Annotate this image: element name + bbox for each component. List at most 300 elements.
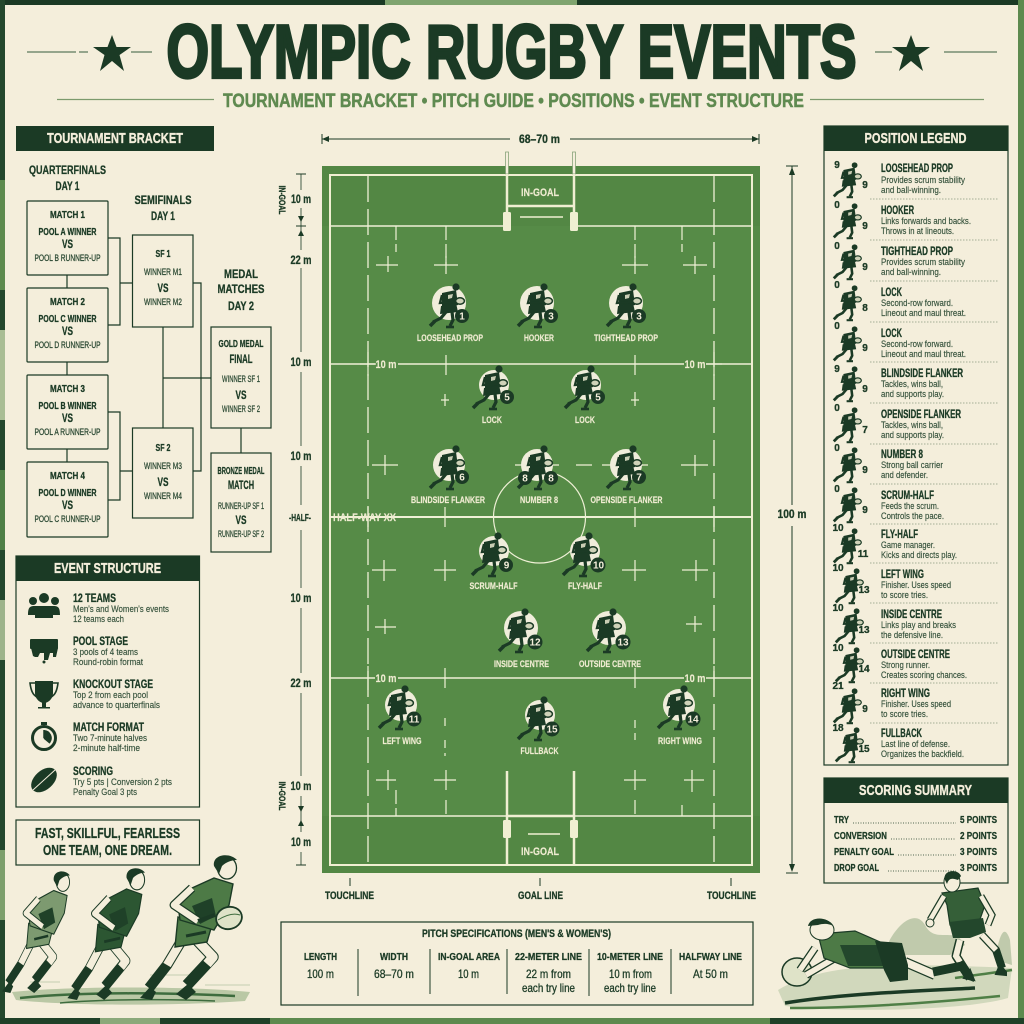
subtitle: TOURNAMENT BRACKET • PITCH GUIDE • POSITIONS • EVENT STRUCTURE — [223, 91, 804, 112]
panel: position legend — [824, 126, 1008, 765]
legend: tighthead prop: TIGHTHEAD PROP — [881, 246, 953, 258]
legend: loosehead prop: 9 — [834, 160, 840, 171]
line labels: 10 m — [376, 359, 397, 371]
legend: inside centre: Links play and breaks — [881, 620, 956, 631]
semifinals heading: DAY 1 — [151, 209, 175, 223]
legend: fly-half: 10 — [832, 523, 844, 534]
bracket heading: TOURNAMENT BRACKET — [47, 130, 183, 147]
player: fly-half: 10 — [593, 560, 604, 572]
player: lock right: 5 — [595, 392, 601, 404]
standing player — [926, 871, 1006, 980]
legend: openside flanker: OPENSIDE FLANKER — [881, 409, 961, 421]
spec: 10-meter line: 10 m from — [609, 967, 652, 981]
legend: number 8: 9 — [862, 465, 868, 476]
match 1: MATCH 1 — [50, 209, 85, 221]
semifinal 1: VS — [158, 281, 168, 295]
item: 12 teams: 12 teams each — [73, 614, 124, 625]
left distance markers: 22 m — [290, 255, 312, 267]
score row: try: 5 POINTS — [960, 814, 997, 826]
player: outside centre — [579, 608, 641, 670]
gold medal final: WINNER SF 1 — [222, 374, 260, 385]
player: fly-half — [563, 532, 606, 592]
legend: fly-half: Game manager. — [881, 540, 935, 551]
player: loosehead prop: 1 — [459, 312, 465, 322]
player: blindside flanker — [411, 445, 485, 506]
player: lock left: 5 — [504, 392, 510, 404]
legend: lock: 9 — [862, 343, 868, 354]
score row: penalty goal — [834, 846, 997, 858]
spec: in-goal area — [438, 951, 500, 981]
bronze medal match: BRONZE MEDAL — [218, 465, 265, 477]
legend: scrum-half: Controls the pace. — [881, 511, 944, 522]
match 3: MATCH 3 — [50, 383, 85, 395]
medal matches heading: DAY 2 — [228, 299, 254, 313]
item: match format: MATCH FORMAT — [73, 722, 144, 734]
quarterfinals heading: DAY 1 — [56, 179, 80, 193]
player: scrum-half: SCRUM-HALF — [470, 581, 518, 592]
legend: lock: Lineout and maul threat. — [881, 349, 966, 360]
legend: fullback: 15 — [858, 744, 870, 755]
player: number 8: 8 — [522, 474, 528, 484]
legend: scrum-half: SCRUM-HALF — [881, 490, 934, 502]
item: pool stage: Round-robin format — [73, 657, 143, 668]
score row: penalty goal: PENALTY GOAL — [834, 846, 894, 858]
spec: in-goal area: 10 m — [458, 967, 479, 981]
spec: 22-meter line — [515, 951, 582, 995]
player: left wing — [379, 685, 422, 747]
player: inside centre — [494, 608, 549, 670]
legend: outside centre: 10 — [832, 643, 844, 654]
illustration: three running players — [2, 855, 250, 1005]
player: loosehead prop — [417, 283, 483, 344]
legend: tighthead prop: Provides scrum stability — [881, 257, 965, 268]
item: knockout stage: KNOCKOUT STAGE — [73, 679, 153, 691]
spec: halfway line: At 50 m — [693, 967, 728, 981]
semifinal 1: SF 1 — [156, 248, 171, 260]
legend: scrum-half: Feeds the scrum. — [881, 501, 939, 512]
legend: lock: Second-row forward. — [881, 339, 953, 350]
player: right wing: RIGHT WING — [658, 736, 702, 747]
player: tighthead prop: TIGHTHEAD PROP — [594, 333, 658, 344]
player: left wing: 11 — [409, 714, 420, 726]
player: inside centre: 12 — [529, 638, 541, 648]
legend: outside centre — [832, 643, 967, 682]
legend: scrum-half: 9 — [862, 505, 868, 516]
spec: 10-meter line: 10-METER LINE — [597, 951, 663, 963]
match 2: POOL C WINNER — [38, 313, 97, 325]
quarterfinals heading — [29, 163, 106, 193]
legend: number 8: 0 — [834, 443, 840, 454]
quarterfinals heading: QUARTERFINALS — [29, 163, 106, 177]
item: match format: Two 7-minute halves — [73, 733, 147, 744]
label: top in-goal: IN-GOAL — [521, 187, 559, 199]
player: outside centre: OUTSIDE CENTRE — [579, 659, 641, 670]
player: hooker: HOOKER — [524, 333, 554, 344]
score row: conversion: CONVERSION — [834, 830, 887, 842]
player: scrum-half — [470, 532, 518, 592]
score row: try — [834, 814, 997, 826]
connectors — [67, 238, 241, 500]
pitch edge labels: TOUCHLINE — [325, 890, 374, 902]
legend heading: POSITION LEGEND — [864, 130, 967, 147]
legend: outside centre: 14 — [858, 664, 870, 675]
left distance markers: 22 m — [290, 678, 312, 690]
legend: inside centre — [832, 603, 956, 643]
event structure heading: EVENT STRUCTURE — [54, 560, 161, 577]
left distance markers: 10 m — [290, 593, 312, 605]
bronze medal match — [211, 453, 271, 552]
left distance markers: 10 m — [290, 357, 312, 369]
panel: pitch specifications — [281, 922, 753, 1005]
legend: loosehead prop — [834, 160, 965, 197]
legend: inside centre: INSIDE CENTRE — [881, 609, 942, 621]
score row: conversion: 2 POINTS — [960, 830, 997, 842]
line labels: 10 m — [684, 359, 706, 371]
legend: left wing: 13 — [858, 585, 870, 596]
legend: hooker: 9 — [862, 221, 868, 232]
item: knockout stage — [73, 679, 160, 711]
legend: lock: 8 — [862, 303, 868, 314]
match 4: VS — [62, 498, 73, 512]
legend: openside flanker: 0 — [834, 403, 840, 414]
spec: length: 100 m — [307, 967, 334, 981]
legend: loosehead prop: LOOSEHEAD PROP — [881, 163, 953, 175]
line labels: 10 m — [684, 673, 706, 685]
bottom goal posts — [503, 771, 578, 865]
match 3: POOL B WINNER — [38, 400, 97, 412]
score row: drop goal — [834, 862, 997, 874]
item: pool stage — [73, 636, 143, 668]
gold medal final: VS — [236, 388, 246, 402]
legend heading — [824, 126, 1008, 151]
semifinal 2: WINNER M4 — [144, 491, 182, 502]
spec: width: WIDTH — [380, 951, 408, 963]
player: hooker: 3 — [548, 312, 554, 322]
left distance markers: 10 m — [291, 194, 311, 206]
legend: tighthead prop: 0 — [834, 241, 840, 252]
pitch markings — [330, 175, 752, 865]
legend: openside flanker: 7 — [862, 425, 868, 436]
legend: right wing: 9 — [862, 704, 868, 715]
legend: blindside flanker: and supports play. — [881, 389, 944, 400]
legend: tighthead prop — [834, 241, 965, 279]
score row: drop goal: DROP GOAL — [834, 862, 879, 874]
player: lock left: LOCK — [482, 415, 502, 426]
match 2 — [27, 288, 108, 362]
legend: blindside flanker: 9 — [834, 364, 840, 375]
semifinal 2: VS — [158, 475, 168, 489]
match 3: POOL A RUNNER-UP — [34, 427, 100, 438]
icon: teams — [28, 593, 60, 618]
panel: pitch specifications: PITCH SPECIFICATIONS (MEN'S & WOMEN'S) — [422, 928, 611, 940]
match 1: VS — [62, 237, 73, 251]
player: blindside flanker: BLINDSIDE FLANKER — [411, 495, 485, 506]
spec: 10-meter line: each try line — [604, 981, 656, 995]
legend: left wing: 10 — [832, 563, 844, 574]
player: number 8 — [518, 445, 558, 506]
item: match format: 2-minute half-time — [73, 743, 140, 754]
panel: scoring summary — [824, 778, 1008, 883]
player: right wing: 14 — [687, 714, 699, 726]
player: lock left — [473, 365, 514, 426]
icon: pool stage — [30, 639, 58, 664]
semifinal 1: WINNER M2 — [144, 297, 182, 308]
gold medal final — [211, 327, 271, 428]
spec: length — [304, 951, 337, 981]
legend: right wing: 21 — [832, 681, 844, 692]
legend: lock: 0 — [834, 321, 840, 332]
match 3 — [27, 375, 108, 449]
match 1: POOL B RUNNER-UP — [34, 253, 100, 264]
semifinals heading: SEMIFINALS — [134, 193, 192, 207]
medal matches heading — [218, 267, 264, 313]
width dimension — [322, 134, 759, 146]
semifinal 1 — [132, 235, 193, 327]
score row: conversion — [834, 830, 997, 842]
item: 12 teams: Men's and Women's events — [73, 604, 169, 615]
semifinal 1: WINNER M1 — [144, 267, 182, 278]
slogan — [16, 820, 200, 865]
legend: right wing — [832, 681, 951, 723]
left distance markers: 10 m — [291, 837, 311, 849]
legend: outside centre: Strong runner. — [881, 660, 930, 671]
legend: fullback: 18 — [832, 723, 844, 734]
legend: lock: LOCK — [881, 287, 902, 299]
label: bottom in-goal: IN-GOAL — [521, 846, 559, 858]
legend: tighthead prop: and ball-winning. — [881, 267, 941, 278]
legend: left wing — [832, 563, 951, 603]
legend: scrum-half: 0 — [834, 484, 840, 495]
legend: lock: 0 — [834, 280, 840, 291]
spec: halfway line — [679, 951, 742, 981]
spec: width: 68–70 m — [374, 967, 414, 981]
match 2: VS — [62, 324, 73, 338]
width dimension: 68–70 m — [519, 134, 560, 146]
player: right wing — [658, 685, 702, 747]
legend: number 8 — [834, 443, 943, 482]
score row: drop goal: 3 POINTS — [960, 862, 997, 874]
match 3: VS — [62, 411, 73, 425]
panel: tournament bracket — [16, 126, 271, 552]
legend: loosehead prop: 9 — [862, 180, 868, 191]
legend: number 8: and defender. — [881, 470, 928, 481]
match 4 — [27, 462, 108, 537]
semifinals heading — [134, 193, 192, 223]
legend: fullback: Organizes the backfield. — [881, 749, 964, 760]
legend: number 8: Strong ball carrier — [881, 460, 943, 471]
item: knockout stage: advance to quarterfinals — [73, 700, 160, 711]
player: inside centre: INSIDE CENTRE — [494, 659, 549, 670]
legend: scrum-half — [834, 484, 944, 522]
diving player — [782, 918, 974, 986]
legend: fullback: Last line of defense. — [881, 739, 950, 750]
legend: inside centre: the defensive line. — [881, 630, 943, 641]
match 4: MATCH 4 — [50, 470, 85, 482]
illustration: player scoring a try — [778, 871, 1012, 1010]
icon: trophy — [30, 681, 58, 708]
legend: right wing: RIGHT WING — [881, 688, 930, 700]
left distance markers: 10 m — [290, 451, 312, 463]
spec: 22-meter line: 22 m from — [526, 967, 571, 981]
semifinal 2 — [132, 428, 193, 518]
legend: lock: Lineout and maul threat. — [881, 308, 966, 319]
player: lock right — [565, 365, 605, 426]
scoring heading — [824, 778, 1008, 803]
legend: right wing: Finisher. Uses speed — [881, 699, 951, 710]
legend: fullback — [832, 723, 964, 762]
legend: left wing: to score tries. — [881, 590, 928, 601]
top goal posts — [503, 152, 578, 231]
icon: rugby ball — [26, 763, 62, 797]
legend: loosehead prop: Provides scrum stability — [881, 175, 965, 186]
item: 12 teams: 12 TEAMS — [73, 593, 116, 605]
item: knockout stage: Top 2 from each pool — [73, 690, 148, 701]
legend: blindside flanker: 9 — [862, 384, 868, 395]
line labels — [333, 359, 706, 685]
match 2: POOL D RUNNER-UP — [34, 340, 100, 351]
medal matches heading: MEDAL — [224, 267, 258, 281]
legend: fly-half: Kicks and directs play. — [881, 550, 957, 561]
score row: penalty goal: 3 POINTS — [960, 846, 997, 858]
player: tighthead prop — [594, 283, 658, 344]
medal matches heading: MATCHES — [218, 282, 264, 296]
bronze medal match: VS — [236, 513, 246, 527]
player: openside flanker: 7 — [636, 472, 642, 484]
legend: fly-half: FLY-HALF — [881, 529, 918, 541]
spec: width — [374, 951, 414, 981]
bronze medal match: RUNNER-UP SF 1 — [218, 501, 264, 512]
legend: openside flanker: and supports play. — [881, 430, 944, 441]
item: match format — [73, 722, 147, 754]
match 2: MATCH 2 — [50, 296, 85, 308]
player: fullback — [518, 696, 560, 757]
item: pool stage: 3 pools of 4 teams — [73, 647, 138, 658]
spec: halfway line: HALFWAY LINE — [679, 951, 742, 963]
left distance markers: IN-GOAL — [277, 186, 287, 215]
gold medal final: WINNER SF 2 — [222, 404, 260, 415]
player: fly-half: FLY-HALF — [568, 581, 602, 592]
player: outside centre: 13 — [617, 638, 629, 648]
legend: blindside flanker: Tackles, wins ball, — [881, 379, 943, 390]
left distance markers: IN-GOAL — [277, 782, 287, 811]
player: openside flanker: OPENSIDE FLANKER — [590, 495, 663, 506]
item: scoring — [73, 766, 172, 798]
spec: in-goal area: IN-GOAL AREA — [438, 951, 500, 963]
legend: hooker: 0 — [834, 200, 840, 211]
legend: inside centre: 13 — [858, 625, 870, 636]
spec: 10-meter line — [597, 951, 663, 995]
legend: lock — [834, 280, 966, 320]
panel: event structure — [16, 556, 200, 807]
legend: left wing: Finisher. Uses speed — [881, 580, 951, 591]
spec: 22-meter line: each try line — [522, 981, 575, 995]
left distance markers: -HALF- — [289, 513, 311, 524]
player: left wing: LEFT WING — [382, 736, 422, 747]
legend: lock: LOCK — [881, 328, 902, 340]
gold medal final: GOLD MEDAL — [218, 338, 264, 350]
icon: right star — [892, 35, 930, 71]
legend: fly-half: 11 — [858, 549, 869, 560]
length dimension — [778, 166, 806, 873]
player: number 8: 8 — [548, 474, 554, 484]
semifinal 2: SF 2 — [156, 442, 171, 454]
pitch edge labels: GOAL LINE — [518, 890, 563, 902]
bronze medal match: MATCH — [228, 478, 254, 492]
legend: hooker: Links forwards and backs. — [881, 216, 971, 227]
item: pool stage: POOL STAGE — [73, 636, 128, 648]
legend: number 8: NUMBER 8 — [881, 449, 923, 461]
icon: stopwatch — [32, 722, 56, 750]
line labels: HALF-WAY XX — [333, 512, 397, 524]
legend: hooker: Throws in at lineouts. — [881, 226, 954, 237]
legend: hooker: HOOKER — [881, 205, 914, 217]
legend: lock — [834, 321, 966, 361]
legend: lock: Second-row forward. — [881, 298, 953, 309]
item: scoring: SCORING — [73, 766, 113, 778]
legend: hooker — [834, 200, 971, 238]
player: fullback: 15 — [546, 724, 558, 736]
item: scoring: Penalty Goal 3 pts — [73, 787, 137, 798]
slogan: ONE TEAM, ONE DREAM. — [43, 843, 172, 859]
legend: blindside flanker: BLINDSIDE FLANKER — [881, 368, 963, 380]
player: blindside flanker: 6 — [459, 472, 465, 484]
item: 12 teams — [73, 593, 169, 625]
spec: 22-meter line: 22-METER LINE — [515, 951, 582, 963]
scoring heading: SCORING SUMMARY — [859, 782, 972, 799]
legend: openside flanker: Tackles, wins ball, — [881, 420, 943, 431]
legend: outside centre: Creates scoring chances. — [881, 670, 967, 681]
player: lock right: LOCK — [575, 415, 595, 426]
pitch edge labels: TOUCHLINE — [707, 890, 756, 902]
pitch — [322, 152, 760, 873]
legend: blindside flanker — [834, 364, 963, 401]
item: scoring: Try 5 pts | Conversion 2 pts — [73, 777, 172, 788]
match 4: POOL C RUNNER-UP — [34, 514, 100, 525]
legend: tighthead prop: 9 — [862, 262, 868, 273]
player: number 8: NUMBER 8 — [520, 495, 558, 506]
slogan: FAST, SKILLFUL, FEARLESS — [35, 826, 180, 842]
left distance markers — [277, 174, 312, 865]
legend: left wing: LEFT WING — [881, 569, 924, 581]
semifinal 2: WINNER M3 — [144, 461, 182, 472]
left distance markers: 10 m — [290, 781, 312, 793]
legend: loosehead prop: and ball-winning. — [881, 185, 941, 196]
legend: inside centre: 10 — [832, 603, 844, 614]
match 1 — [27, 201, 108, 275]
icon: left star — [93, 35, 131, 71]
length dimension: 100 m — [778, 509, 806, 521]
bronze medal match: RUNNER-UP SF 2 — [218, 529, 264, 540]
player: hooker — [518, 283, 558, 344]
legend: fly-half — [832, 523, 957, 563]
legend: outside centre: OUTSIDE CENTRE — [881, 649, 950, 661]
player: tighthead prop: 3 — [636, 312, 642, 322]
player: scrum-half: 9 — [504, 560, 510, 572]
match 1: POOL A WINNER — [38, 226, 97, 238]
pitch edge labels — [325, 878, 756, 902]
line labels: 10 m — [376, 673, 397, 685]
legend: openside flanker — [834, 403, 961, 442]
event structure heading — [16, 556, 200, 581]
match 4: POOL D WINNER — [38, 487, 97, 499]
player: loosehead prop: LOOSEHEAD PROP — [417, 333, 483, 344]
player: openside flanker — [590, 445, 663, 506]
spec: length: LENGTH — [304, 951, 337, 963]
bracket heading — [16, 126, 214, 151]
legend: right wing: to score tries. — [881, 709, 928, 720]
gold medal final: FINAL — [230, 352, 252, 366]
player: fullback: FULLBACK — [520, 746, 559, 757]
